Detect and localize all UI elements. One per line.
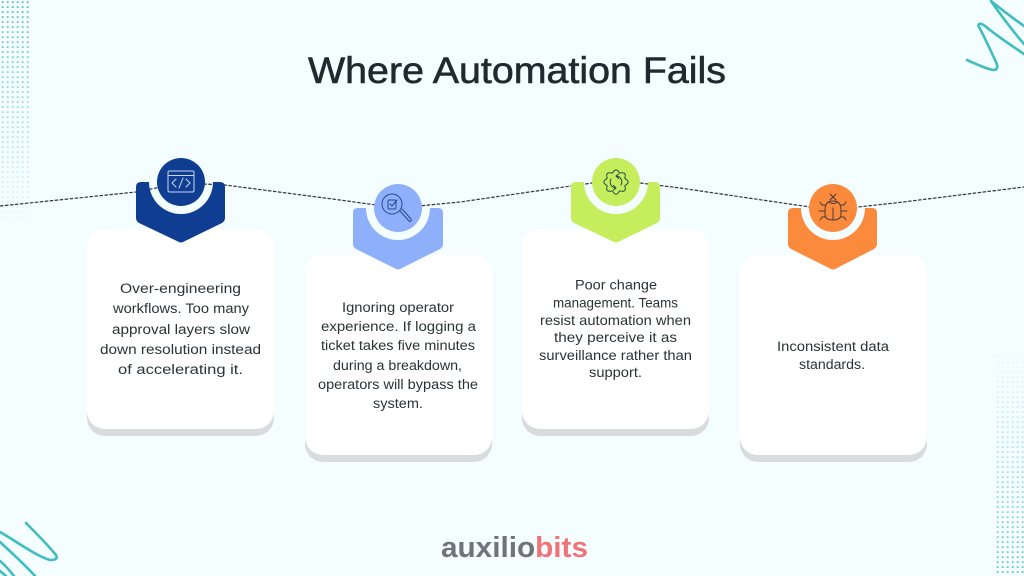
text block <box>318 300 478 412</box>
panel: ignoring operator experience <box>305 184 492 462</box>
badge <box>353 208 443 270</box>
text block: standards. <box>799 357 865 373</box>
text block: Inconsistent data <box>777 339 889 355</box>
text block: Ignoring operator <box>342 300 454 316</box>
text block: during a breakdown, <box>333 358 462 374</box>
text block: they perceive it as <box>554 330 677 345</box>
text block: experience. If logging a <box>321 319 476 335</box>
badge <box>788 208 877 270</box>
icon: magnifier with checkmark <box>374 184 422 232</box>
text block: operators will bypass the <box>318 377 478 393</box>
icon: gear with refresh arrows <box>592 158 640 206</box>
text block: support. <box>589 365 642 380</box>
panel: inconsistent data standards <box>740 184 927 462</box>
text block: workflows. Too many <box>112 301 250 317</box>
text block: Poor change <box>575 278 657 292</box>
card <box>305 255 492 462</box>
text block: management. Teams <box>553 296 678 310</box>
text block <box>539 278 692 380</box>
squiggle: bottom left <box>0 523 57 576</box>
badge <box>571 182 660 242</box>
text block: of accelerating it. <box>118 362 243 378</box>
text block <box>100 281 261 378</box>
dot pattern: top left <box>0 0 30 218</box>
text block: resist automation when <box>540 313 691 328</box>
dot pattern: bottom right <box>995 355 1024 576</box>
squiggle: top right <box>967 1 1024 70</box>
dashed connector line <box>0 183 1024 208</box>
text block: surveillance rather than <box>539 348 692 363</box>
text block: approval layers slow <box>112 322 251 338</box>
icon: bug <box>809 184 857 232</box>
text block: ticket takes five minutes <box>321 338 475 354</box>
title: Where Automation Fails <box>308 50 726 91</box>
card <box>87 229 274 436</box>
badge <box>136 182 225 242</box>
text block: Over-engineering <box>120 281 241 297</box>
text block: down resolution instead <box>100 342 261 358</box>
card <box>522 229 709 436</box>
logo: auxiliobits: auxiliobits <box>441 532 588 564</box>
panel: over-engineering workflows <box>87 158 274 436</box>
panel: poor change management <box>522 158 709 436</box>
icon: code window <box>157 158 205 206</box>
card <box>740 255 927 462</box>
text block: system. <box>373 396 423 412</box>
text block <box>777 339 889 373</box>
